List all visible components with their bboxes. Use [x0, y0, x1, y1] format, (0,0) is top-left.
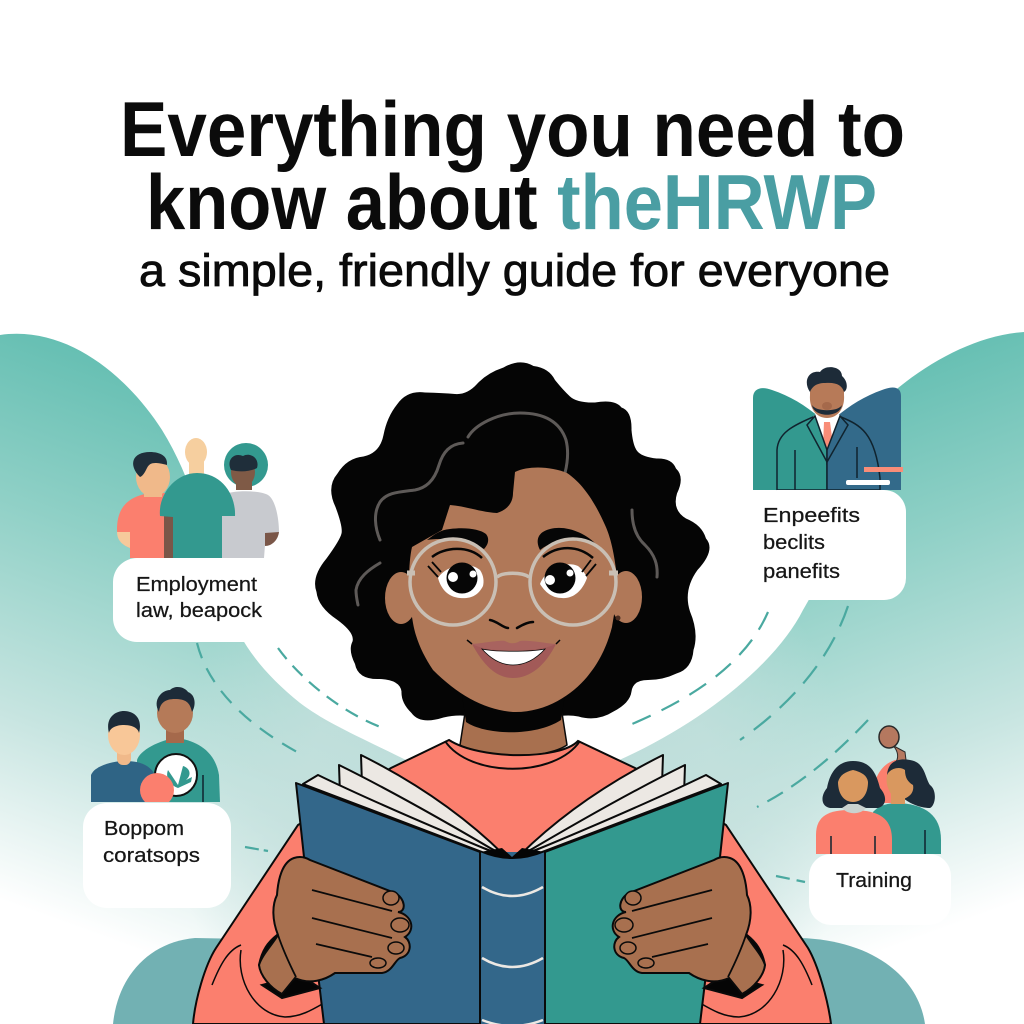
- eyebrows: [427, 528, 598, 550]
- card: benefits: [755, 490, 906, 600]
- dashed connector lines: [197, 606, 868, 882]
- title: know about theHRWP: [146, 158, 877, 246]
- card: benefits: beclits: [763, 532, 825, 554]
- chin shadow: [462, 695, 565, 732]
- card: workshops: [83, 803, 231, 908]
- face: [409, 468, 617, 712]
- presenter illustration: [753, 367, 903, 490]
- sweater: [193, 740, 831, 1024]
- woman character: [315, 362, 710, 756]
- book right cover: [543, 783, 728, 1024]
- card: employment law: [113, 558, 270, 642]
- ears: [385, 571, 642, 624]
- open book: [296, 755, 728, 1024]
- background: centre tint: [234, 654, 790, 916]
- background: bottom right blob: [720, 938, 925, 1024]
- background: left teal shape: [0, 334, 410, 1024]
- card: training: Training: [836, 870, 912, 892]
- card: employment law: Employment: [136, 574, 257, 596]
- book pages right: [520, 755, 721, 855]
- card: training: [809, 854, 951, 925]
- people group: training: [816, 726, 941, 854]
- hair highlights: [356, 413, 657, 605]
- glasses: [407, 539, 618, 625]
- eyes: [428, 548, 596, 598]
- book pages left: [303, 755, 504, 855]
- card: workshops: coratsops: [103, 845, 200, 867]
- card: benefits: panefits: [763, 561, 840, 583]
- card: workshops: Boppom: [104, 818, 184, 840]
- people group: employment law: [117, 438, 279, 558]
- book spine: [480, 848, 545, 1024]
- right hand: [613, 857, 765, 998]
- card: benefits: Enpeefits: [763, 505, 860, 527]
- background: bottom left blob: [113, 938, 300, 1024]
- neck: [460, 700, 567, 756]
- title: Everything you need to: [120, 85, 905, 173]
- mouth: [467, 640, 560, 678]
- hair: [315, 362, 710, 728]
- title: [120, 85, 905, 246]
- people group: workshops: [91, 687, 220, 807]
- earring: [616, 616, 620, 620]
- subtitle: a simple, friendly guide for everyone: [139, 245, 890, 296]
- card: employment law: law, beapock: [136, 600, 263, 622]
- left hand: [259, 857, 411, 998]
- background: right teal shape: [615, 332, 1024, 1024]
- nose: [490, 620, 533, 628]
- book left cover: [296, 783, 482, 1024]
